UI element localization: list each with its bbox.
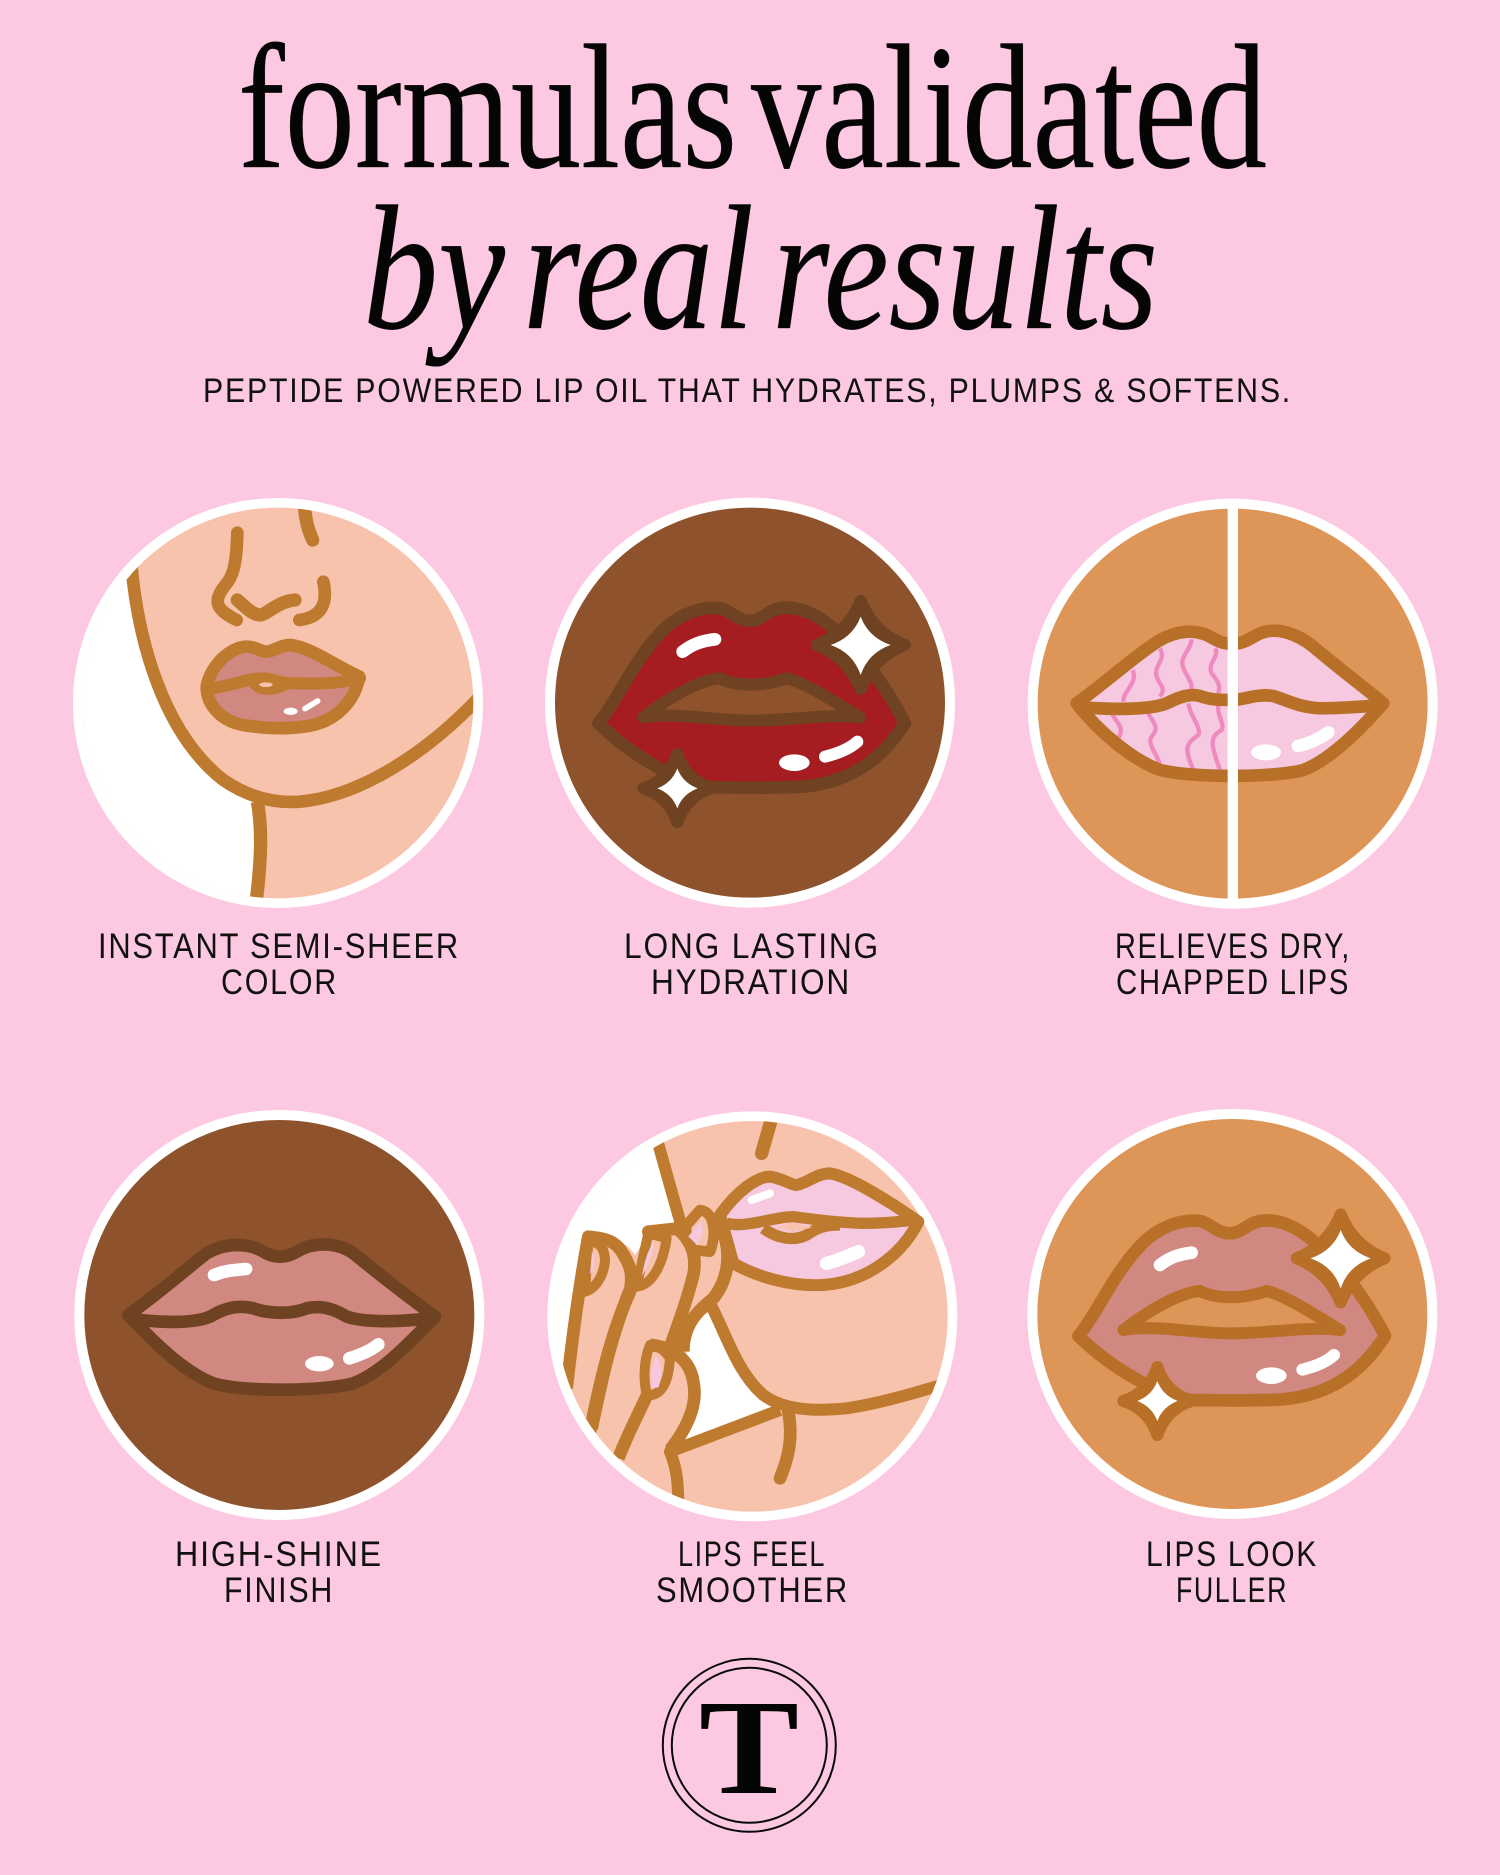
panel: high-shine finish (79, 1115, 479, 1610)
subtitle: PEPTIDE POWERED LIP OIL THAT HYDRATES, PLUMPS & SOFTENS. (203, 372, 1292, 410)
label (98, 927, 460, 1002)
icon: glossy lips on deep skin (79, 1115, 479, 1515)
label: SMOOTHER (656, 1571, 849, 1610)
label: COLOR (221, 963, 338, 1002)
title line 2: results (772, 169, 1158, 367)
label: LONG LASTING (624, 927, 880, 966)
label (1146, 1535, 1318, 1610)
title line 2: by (363, 169, 506, 367)
label: LIPS FEEL (678, 1535, 826, 1574)
title line 1 (238, 8, 1267, 206)
icon: red glossy lips with sparkles (550, 503, 950, 903)
label: FINISH (224, 1571, 334, 1610)
label: HIGH-SHINE (175, 1535, 383, 1574)
label (175, 1535, 383, 1610)
icon: before and after lips (1033, 500, 1433, 908)
label: CHAPPED LIPS (1116, 963, 1350, 1002)
label: HYDRATION (651, 963, 851, 1002)
label: FULLER (1176, 1571, 1288, 1610)
panel: instant semi-sheer color (73, 498, 483, 994)
label: LIPS LOOK (1146, 1535, 1318, 1574)
logo: T monogram in double ring: T (699, 1673, 799, 1823)
title line 1: validated (751, 8, 1267, 206)
label (624, 927, 880, 1002)
title (238, 8, 1267, 367)
title line 2 (363, 169, 1158, 367)
label: INSTANT SEMI-SHEER (98, 927, 460, 966)
title line 2: real (523, 169, 754, 367)
icon: full lips with sparkles (1032, 1114, 1432, 1514)
label: RELIEVES DRY, (1115, 927, 1351, 966)
icon: hand applying oil to lips (547, 1111, 958, 1522)
panel: lips look fuller (1032, 1114, 1432, 1610)
label (1115, 927, 1351, 1002)
icon: face with tinted lips (73, 498, 483, 908)
panel: lips feel smoother (547, 1111, 958, 1602)
title line 1: formulas (238, 8, 737, 206)
label (656, 1535, 849, 1610)
logo: T monogram in double ring (663, 1659, 836, 1832)
panel: long lasting hydration (550, 503, 950, 1002)
panel: relieves dry, chapped lips (1033, 500, 1433, 1002)
